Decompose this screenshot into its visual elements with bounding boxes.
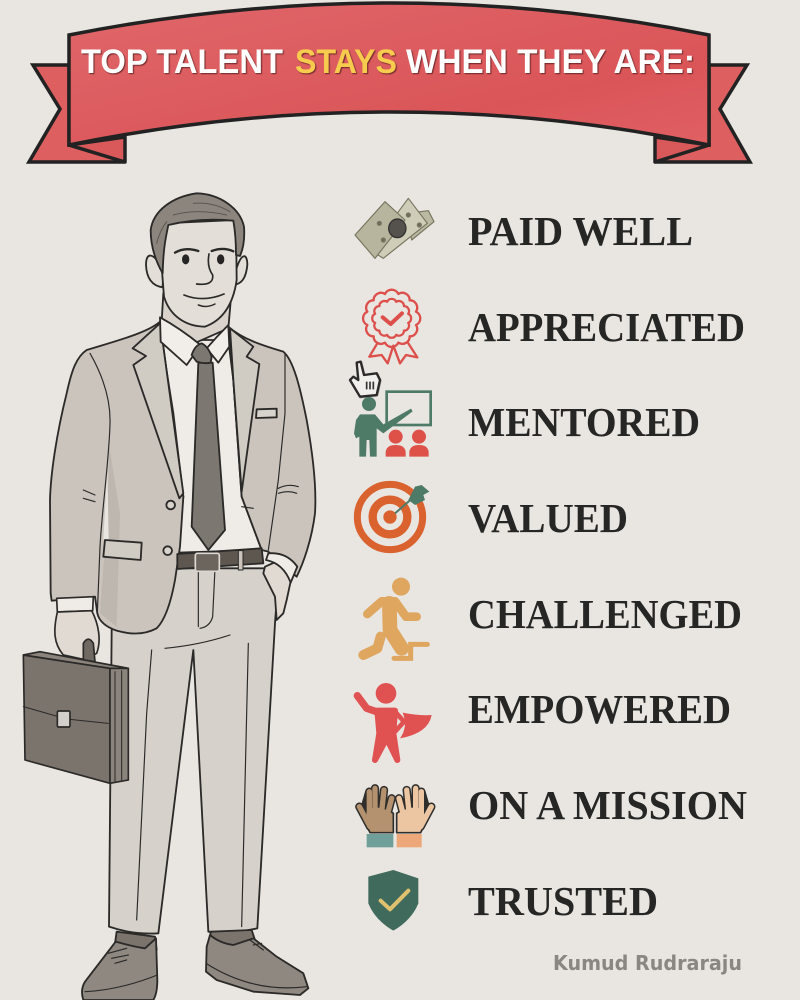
label: challenged: CHALLENGED [468, 591, 742, 637]
title text [81, 43, 695, 81]
right hand in pocket [263, 553, 297, 620]
title banner [29, 3, 750, 162]
illustration: lower hand and briefcase [23, 597, 128, 783]
icon: shield with check [368, 870, 418, 931]
shoes [82, 930, 308, 1000]
hair [151, 193, 244, 273]
illustration: man in suit with briefcase [50, 193, 315, 1000]
suit jacket [50, 322, 315, 633]
shirt collar [160, 317, 229, 365]
banner main ribbon [69, 3, 709, 145]
hair strands [157, 203, 230, 243]
banner right tail [655, 65, 750, 162]
shirt [162, 340, 262, 553]
label: empowered: EMPOWERED [468, 686, 731, 732]
icon: award rosette [363, 290, 420, 363]
title text: STAYS [295, 43, 397, 81]
belt [177, 548, 263, 571]
breast pocket [256, 409, 277, 418]
label: valued: VALUED [468, 495, 628, 541]
title text: TOP TALENT [81, 43, 283, 81]
title text: WHEN THEY ARE: [406, 43, 695, 81]
icon: hero with cape [357, 683, 432, 760]
briefcase handle [83, 639, 95, 662]
trousers [109, 568, 277, 934]
sleeve cuff [57, 597, 93, 612]
list of retention factors [468, 208, 747, 924]
banner left tail [29, 65, 125, 162]
jacket buttons [166, 501, 175, 509]
label: appreciated: APPRECIATED [468, 304, 745, 350]
tie [192, 343, 225, 550]
label: mentored: MENTORED [468, 399, 700, 445]
icon: cursor hand [350, 362, 380, 397]
label: paid well: PAID WELL [468, 208, 693, 254]
icon: target with arrow [357, 484, 429, 550]
flap pocket [103, 540, 142, 560]
icon: mentor at board [354, 392, 431, 457]
left hand [359, 788, 393, 833]
icon: raised hands [359, 788, 431, 847]
label: trusted: TRUSTED [468, 878, 658, 924]
neck and head [146, 220, 247, 347]
lapels [133, 323, 183, 498]
left hand [55, 611, 99, 659]
icon: person climbing stairs [363, 578, 427, 658]
briefcase [23, 652, 128, 783]
right hand [397, 788, 431, 833]
author credit: Kumud Rudraraju [553, 951, 742, 975]
face features [175, 249, 233, 306]
label: on a mission: ON A MISSION [468, 782, 747, 828]
banner folds [69, 137, 709, 162]
icon: money [355, 198, 434, 258]
